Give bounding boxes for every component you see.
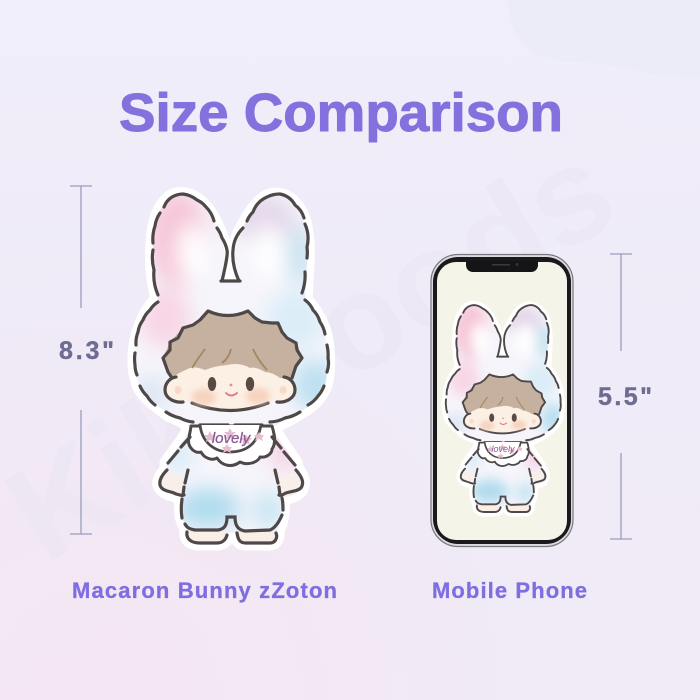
label: 5.5 inches: 5.5" bbox=[598, 383, 652, 411]
illustration: Macaron Bunny zZoton bbox=[130, 180, 337, 550]
label: 8.3 inches: 8.3" bbox=[59, 337, 114, 365]
phone bbox=[431, 254, 573, 546]
caption: bunny: Macaron Bunny zZoton bbox=[72, 578, 337, 603]
dimension: phone height bbox=[598, 254, 652, 539]
phone body bbox=[431, 254, 573, 546]
bunny on phone screen bbox=[443, 297, 566, 516]
title: Size Comparison bbox=[119, 84, 563, 143]
phone notch bbox=[466, 261, 538, 272]
bib text: lovely bbox=[212, 430, 252, 447]
watermark: KikiGoods bbox=[0, 113, 639, 590]
infographic canvas bbox=[60, 92, 650, 603]
dimension: bunny height bbox=[59, 186, 114, 534]
phone screen bbox=[437, 262, 567, 540]
caption: phone: Mobile Phone bbox=[432, 578, 587, 603]
phone bib text: lovely bbox=[491, 444, 515, 454]
